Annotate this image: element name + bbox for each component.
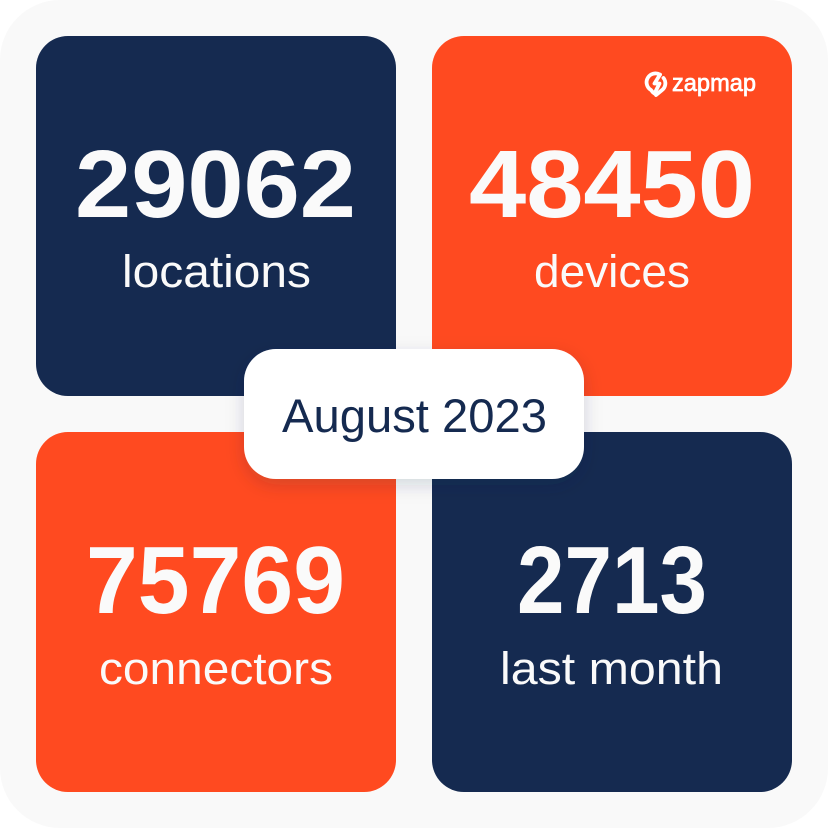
panel: locations xyxy=(36,36,396,396)
last month number: 2713 xyxy=(517,527,707,634)
icon: lightning bolt xyxy=(647,73,665,95)
last month label: last month xyxy=(500,643,723,694)
date text: August 2023 xyxy=(282,389,547,442)
connectors number: 75769 xyxy=(86,527,345,634)
devices number: 48450 xyxy=(469,131,755,238)
panel: connectors xyxy=(36,432,396,792)
zapmap logo xyxy=(647,70,756,97)
connectors label: connectors xyxy=(99,643,333,694)
panel: last month xyxy=(432,432,792,792)
devices label: devices xyxy=(534,246,690,297)
locations number: 29062 xyxy=(75,131,356,238)
logo wordmark: zapmap xyxy=(672,70,756,97)
date badge xyxy=(244,349,584,479)
locations label: locations xyxy=(122,246,311,297)
panel: devices xyxy=(432,36,792,396)
